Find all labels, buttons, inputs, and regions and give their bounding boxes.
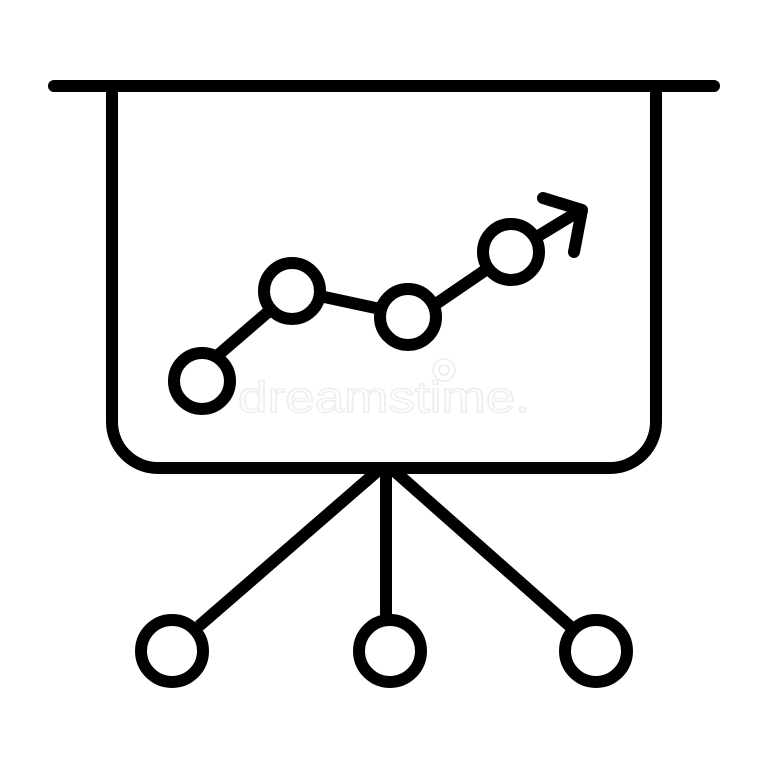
tripod stand bbox=[141, 468, 627, 682]
left leg bbox=[199, 468, 381, 626]
chart point 3 bbox=[380, 289, 436, 345]
chart segment 1 bbox=[210, 306, 275, 362]
left foot bbox=[141, 620, 203, 682]
board top bar bbox=[54, 80, 714, 92]
board frame bbox=[112, 86, 656, 468]
center foot bbox=[359, 620, 421, 682]
right leg bbox=[391, 468, 572, 628]
arrow head bbox=[543, 198, 582, 252]
watermark bbox=[238, 359, 530, 422]
chart point 1 bbox=[174, 353, 230, 409]
chart point 2 bbox=[264, 263, 320, 319]
line chart with rising arrow bbox=[174, 198, 582, 409]
arrow shaft bbox=[530, 210, 581, 241]
chart segment 3 bbox=[430, 267, 490, 308]
center leg bbox=[380, 468, 392, 625]
chart point 4 bbox=[483, 224, 539, 280]
chart segment 2 bbox=[315, 295, 385, 310]
right foot bbox=[565, 620, 627, 682]
watermark: dreamstime. bbox=[238, 373, 530, 422]
